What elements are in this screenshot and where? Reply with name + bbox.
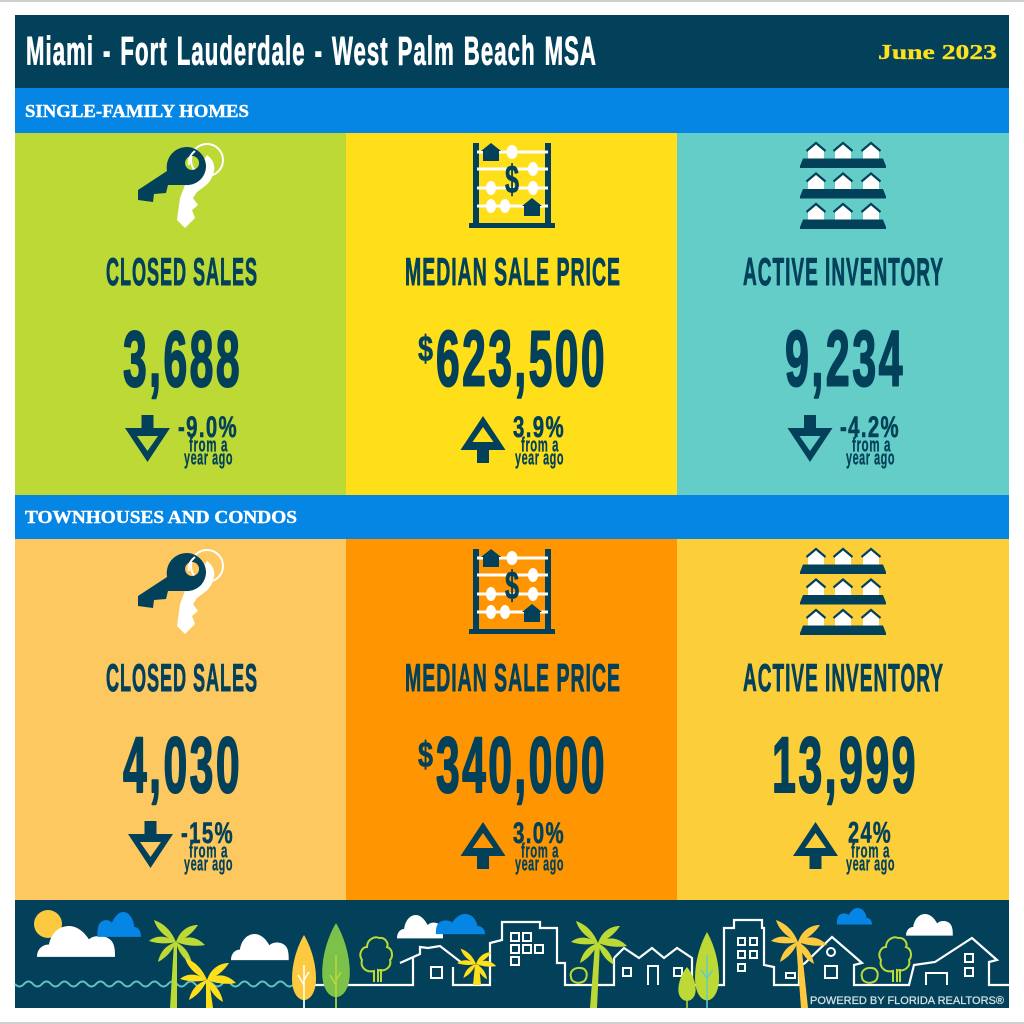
skyline outline	[315, 920, 1009, 985]
panel: single-family active inventory	[677, 133, 1009, 495]
windows and doors	[431, 933, 973, 985]
down arrow	[788, 415, 832, 462]
change text	[846, 816, 895, 876]
trees	[292, 923, 911, 1008]
up arrow	[793, 822, 838, 869]
change text: year ago	[846, 854, 895, 876]
section bar: townhouses and condos	[15, 495, 1009, 539]
panel: condo closed sales	[15, 539, 346, 900]
palm trees	[149, 920, 827, 1008]
change text	[178, 411, 238, 470]
change text: -15%	[181, 817, 234, 850]
up arrow	[460, 416, 506, 463]
change text: year ago	[846, 448, 895, 470]
panel: condo closed sales: CLOSED SALES	[106, 657, 258, 700]
change text: from a	[521, 434, 559, 456]
change text: year ago	[515, 854, 564, 876]
panel: condo median sale price	[346, 539, 677, 900]
change text: from a	[851, 840, 890, 862]
icon: houses on shelves	[800, 143, 886, 229]
value: 3,688	[123, 314, 242, 403]
header band	[15, 15, 1009, 88]
waves	[15, 982, 294, 986]
value: 340,000	[436, 720, 607, 809]
icon: abacus	[469, 549, 555, 634]
value: $	[418, 328, 433, 369]
change text	[181, 817, 234, 876]
change text: from a	[852, 434, 891, 456]
value	[418, 314, 607, 402]
icon: abacus: $	[505, 158, 519, 202]
icon: abacus	[469, 143, 555, 228]
credit: POWERED BY FLORIDA REALTORS®	[810, 995, 1004, 1007]
change text: 3.9%	[513, 411, 565, 444]
icon: keys	[138, 144, 223, 228]
change text: year ago	[184, 448, 233, 470]
date: June 2023	[878, 40, 997, 64]
change text: year ago	[515, 448, 564, 470]
panel: single-family closed sales: CLOSED SALES	[106, 251, 258, 294]
panel: condo median sale price: MEDIAN SALE PRICE	[405, 657, 621, 700]
down arrow	[125, 415, 170, 462]
change text: from a	[521, 840, 559, 862]
value	[418, 720, 607, 809]
icon: abacus: $	[505, 564, 519, 608]
change text	[513, 411, 565, 470]
value: 9,234	[785, 314, 905, 402]
icon: sun	[34, 910, 62, 938]
down arrow	[128, 821, 173, 868]
panel: single-family median sale price	[346, 133, 677, 495]
section bar: single-family homes	[15, 88, 1009, 133]
change text: from a	[189, 840, 228, 862]
change text: year ago	[184, 854, 233, 876]
change text: -9.0%	[178, 411, 238, 444]
change text: 24%	[848, 816, 892, 850]
icon: keys	[138, 550, 223, 634]
panel: single-family median sale price: MEDIAN SALE PRICE	[405, 251, 621, 294]
clouds	[37, 908, 953, 960]
change text	[840, 411, 900, 470]
bottom edge line	[0, 1022, 1024, 1024]
value: 623,500	[436, 314, 607, 402]
change text: -4.2%	[840, 411, 900, 444]
icon: houses on shelves	[800, 549, 886, 635]
up arrow	[460, 822, 506, 869]
top edge line	[0, 0, 1024, 2]
change text: from a	[189, 434, 228, 456]
value: 4,030	[123, 720, 242, 809]
value: $	[418, 734, 433, 775]
panel: single-family closed sales	[15, 133, 346, 495]
panel: condo active inventory	[677, 539, 1009, 900]
section bar: townhouses and condos: TOWNHOUSES AND CONDOS	[25, 507, 297, 527]
change text: 3.0%	[513, 817, 565, 850]
change text	[513, 817, 565, 876]
section bar: single-family homes: SINGLE-FAMILY HOMES	[25, 101, 249, 121]
footer illustration	[15, 900, 1009, 1008]
